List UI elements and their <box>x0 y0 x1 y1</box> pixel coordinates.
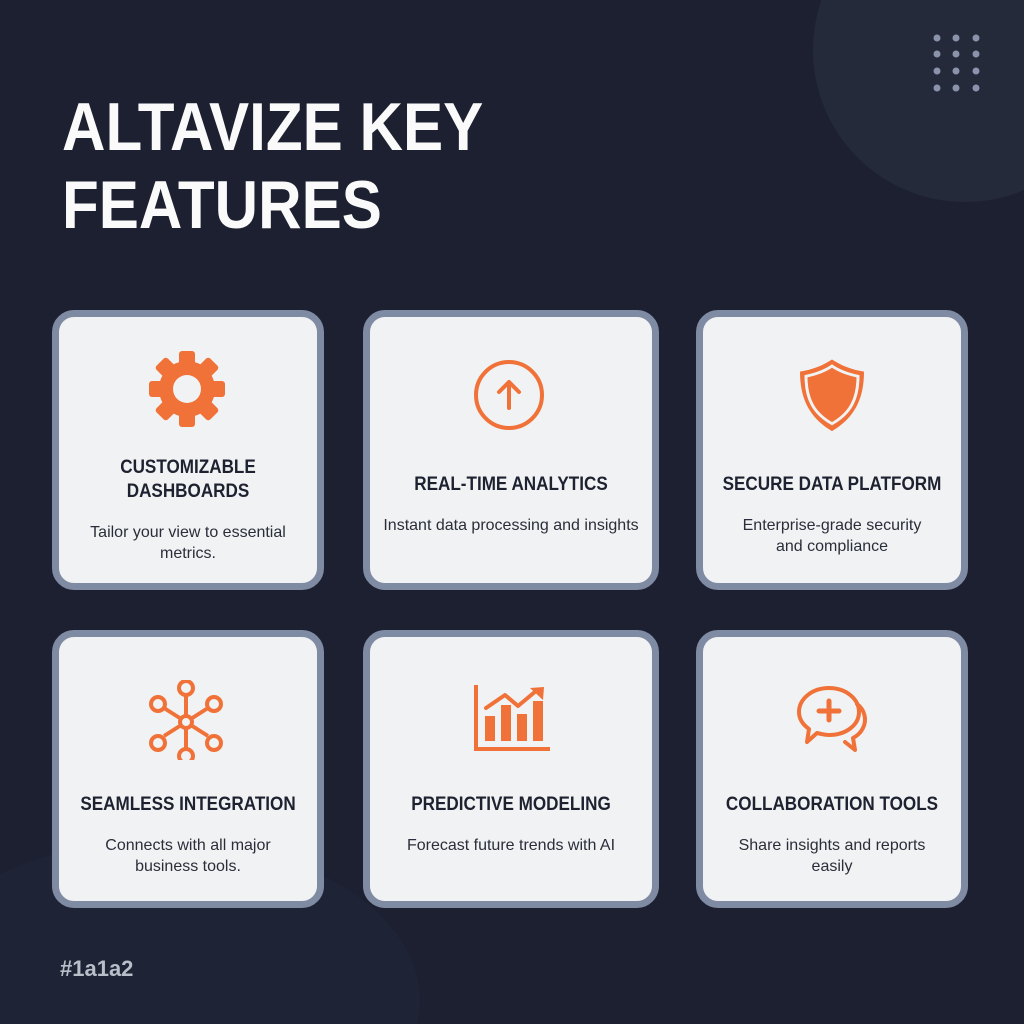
text: business tools. <box>135 858 241 875</box>
text: Tailor your view to essential <box>90 524 286 541</box>
text <box>743 517 922 555</box>
panel: secure data platform <box>696 310 968 590</box>
text: Forecast future trends with AI <box>407 837 615 854</box>
text <box>739 837 925 875</box>
text <box>90 524 286 562</box>
heading: DASHBOARDS <box>127 481 249 502</box>
icon: network <box>149 680 223 760</box>
panel: real-time analytics <box>363 310 659 590</box>
panel: customizable dashboards <box>52 310 324 590</box>
text: Share insights and reports <box>739 837 925 854</box>
heading <box>120 457 256 502</box>
icon: gear <box>149 351 225 427</box>
text <box>105 837 271 875</box>
panel: predictive modeling <box>363 630 659 908</box>
heading: COLLABORATION TOOLS <box>726 794 938 815</box>
heading: SECURE DATA PLATFORM <box>723 474 941 495</box>
heading: CUSTOMIZABLE <box>120 457 256 478</box>
heading: REAL-TIME ANALYTICS <box>414 474 608 495</box>
heading: SEAMLESS INTEGRATION <box>80 794 296 815</box>
icon: up arrow circle <box>474 360 544 430</box>
icon: shield <box>800 360 864 432</box>
title: ALTAVIZE KEY <box>62 89 483 165</box>
text: easily <box>812 858 852 875</box>
title <box>62 89 483 243</box>
text: Instant data processing and insights <box>383 517 639 534</box>
icon: chat bubbles <box>797 686 867 752</box>
panel: seamless integration <box>52 630 324 908</box>
icon: dot grid <box>934 34 980 92</box>
icon: chart <box>474 685 550 751</box>
heading: PREDICTIVE MODELING <box>411 794 611 815</box>
footer text: #1a1a2 <box>60 956 133 981</box>
text: metrics. <box>160 545 216 562</box>
title: FEATURES <box>62 167 382 243</box>
panel: collaboration tools <box>696 630 968 908</box>
text: Enterprise-grade security <box>743 517 921 534</box>
text: Connects with all major <box>105 837 271 854</box>
text: and compliance <box>776 538 888 555</box>
